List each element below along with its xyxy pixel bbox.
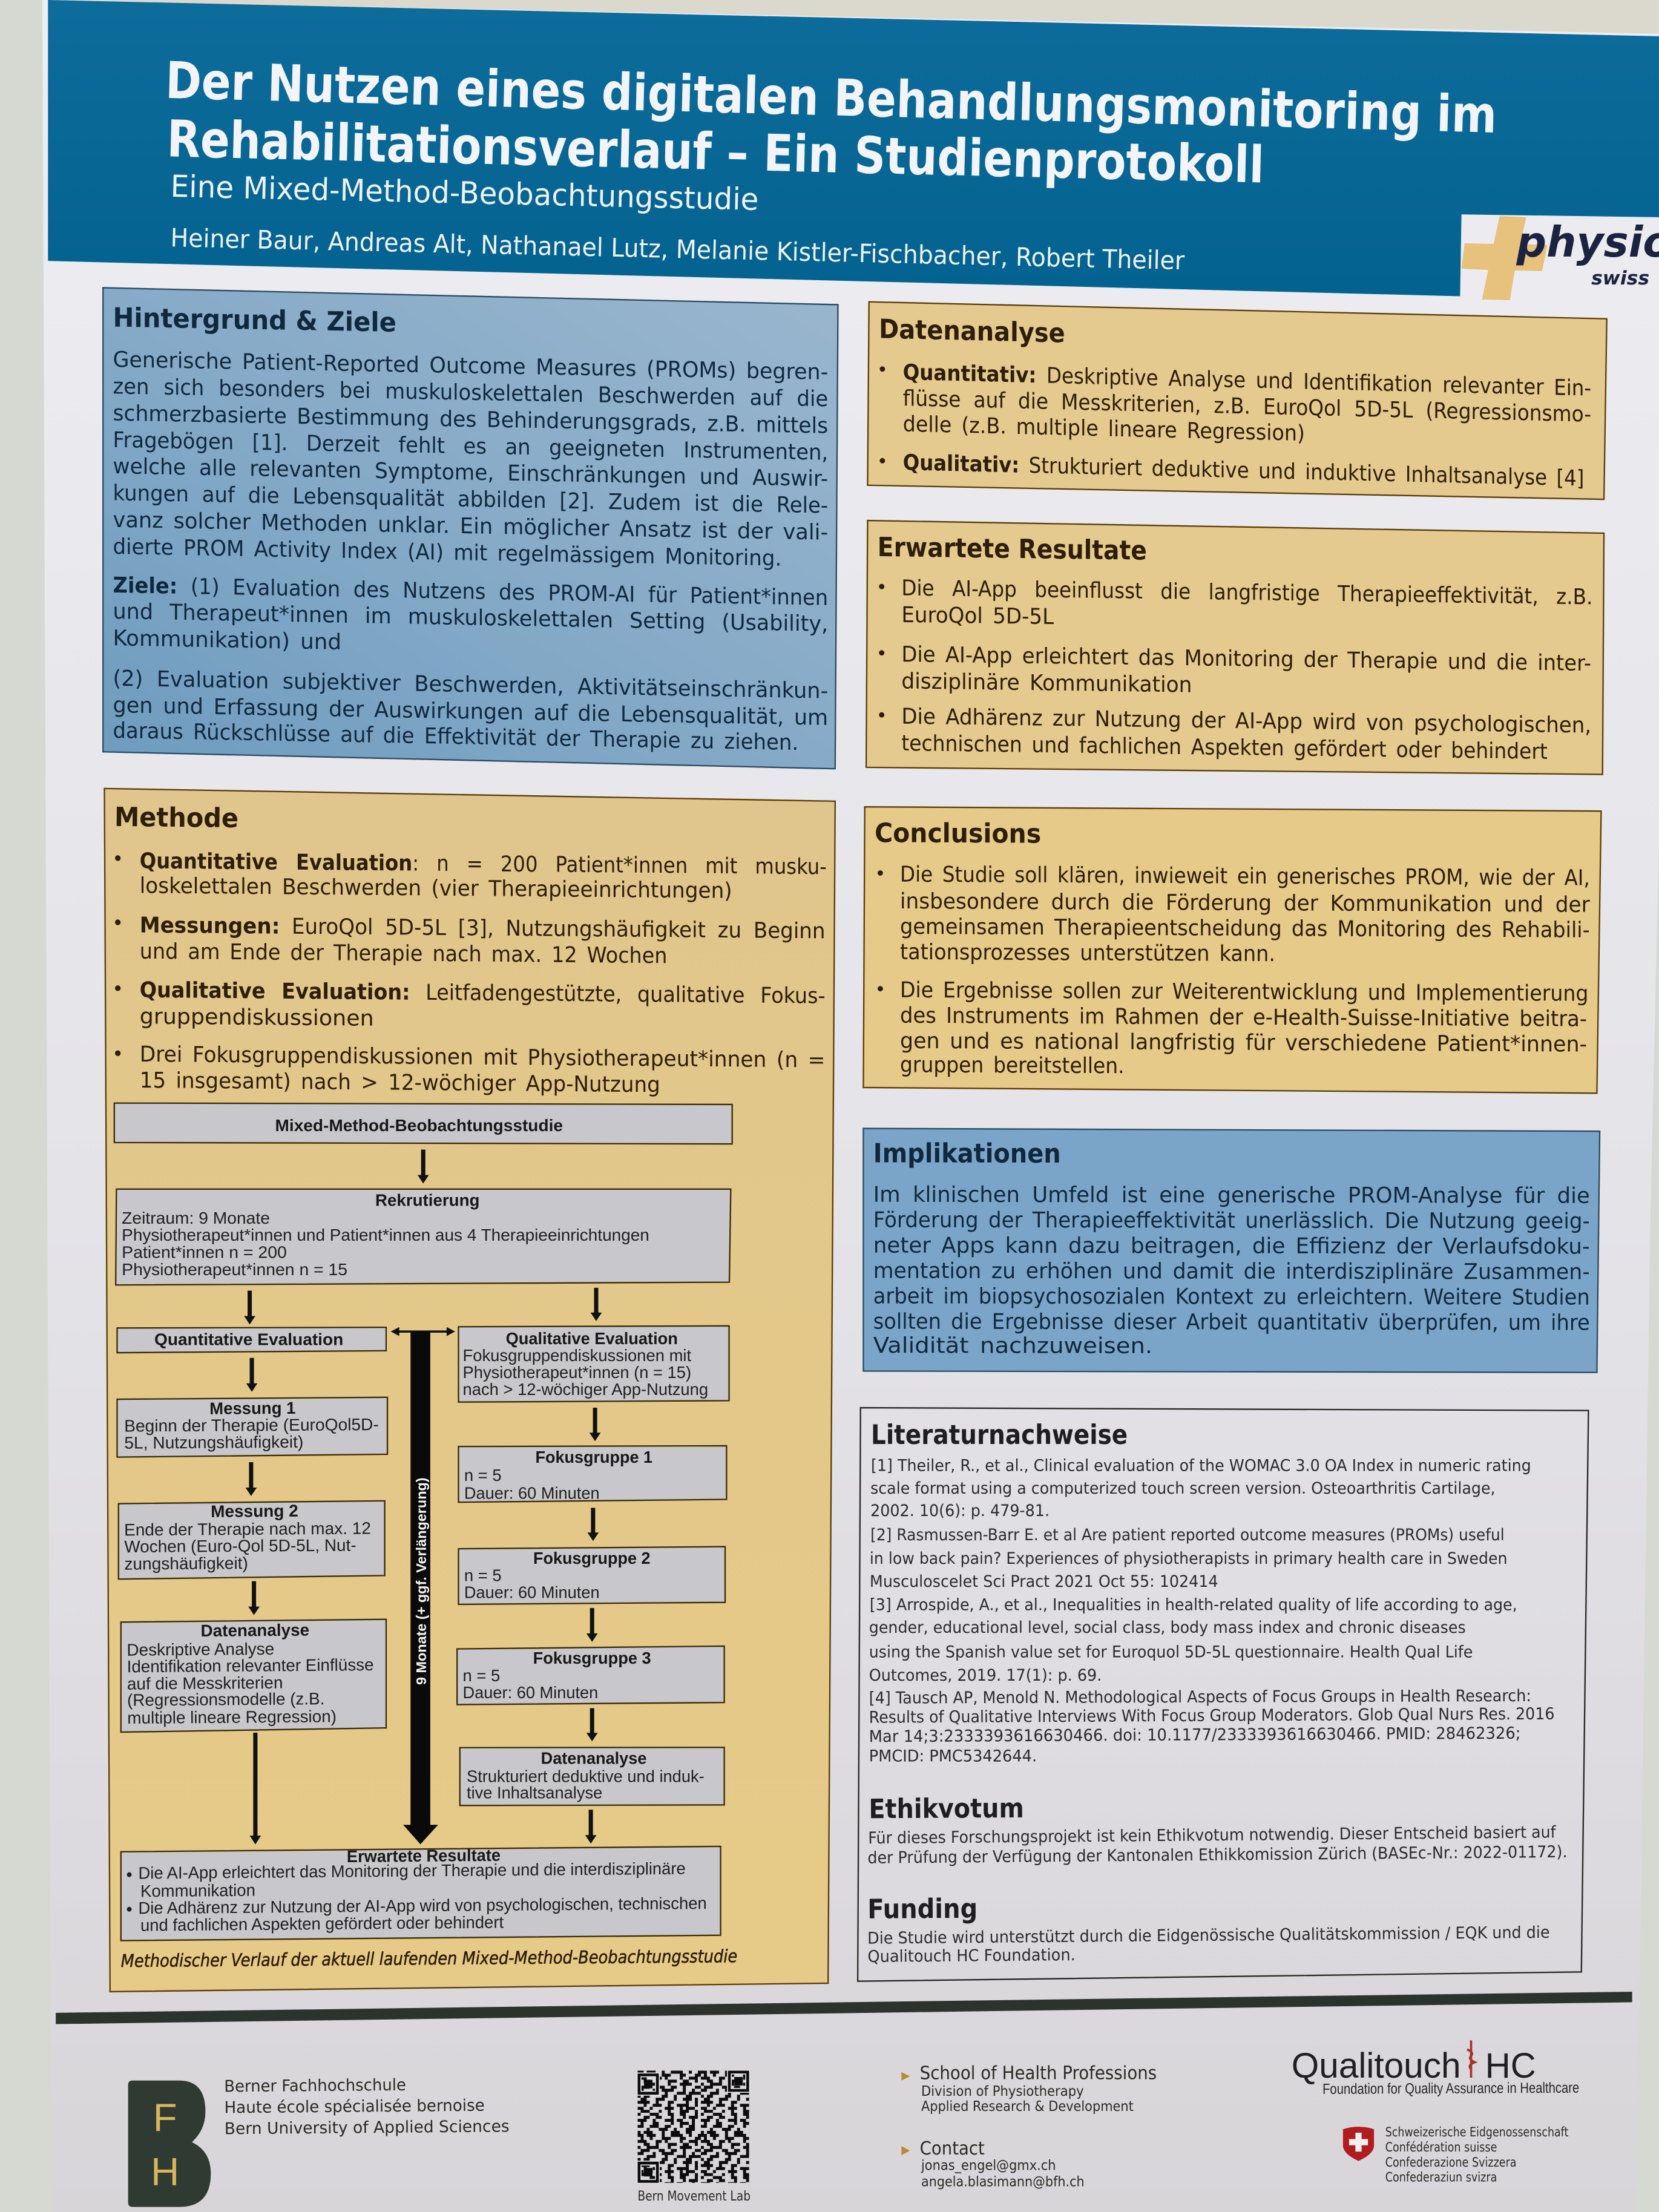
heading: Funding: Funding (867, 1894, 977, 1925)
box: Qualitative Evaluation: nach > 12-wöchiger App-Nutzung (463, 1380, 708, 1399)
text block: references: gender, educational level, social class, body mass index and chronic diseases (869, 1618, 1466, 1637)
box: Mixed-Method-Beobachtungsstudie (114, 1103, 732, 1144)
contact emails (921, 2158, 1085, 2190)
arrow: to Messung 2 (246, 1462, 257, 1496)
icon: Swiss shield (1343, 2127, 1374, 2161)
panel: Literatur, Ethikvotum, Funding (858, 1408, 1588, 1981)
text block: references: [2] Rasmussen-Barr E. et al Are patient reported outcome measures (PROMs) useful (870, 1526, 1505, 1544)
text block: references: Mar 14;3:2333393616630466. doi: 10.1177/2333393616630466. PMID: 28462326; (869, 1724, 1521, 1746)
heading: Literaturnachweise: Literaturnachweise (871, 1420, 1128, 1451)
text block: Hintergrund: Fragebögen [1]. Derzeit fehlt es an geeigneten Instrumenten, (113, 428, 828, 465)
text block: bullets: Qualitativ: Strukturiert deduktive und induktive Inhaltsanalyse [4] (903, 450, 1584, 491)
HC wordmark: HC (1485, 2046, 1536, 2086)
Confederation names: Confederaziun svizra (1385, 2170, 1497, 2185)
text block: Methode bullets: loskelettalen Beschwerden (vier Therapieeinrichtungen) (140, 873, 732, 904)
text block: Hintergrund: dierte PROM Activity Index (AI) mit regelmässigem Monitoring. (113, 534, 781, 571)
box: Erwartete Resultate: Die AI-App erleichtert das Monitoring der Therapie und die interdisziplinäre (138, 1859, 686, 1882)
box: Datenanalyse qualitative (460, 1747, 724, 1805)
text block: Ziele: Ziele: (1) Evaluation des Nutzens des PROM-AI für Patient*innen (113, 573, 828, 611)
arrow: to Fokusgruppe 1 (590, 1408, 600, 1441)
text block: references: [4] Tausch AP, Menold N. Methodological Aspects of Focus Groups in Health Research: (869, 1687, 1531, 1708)
text block: sollten die Ergebnisse dieser Arbeit quantitativ überprüfen, um ihre (873, 1310, 1590, 1336)
arrow: double-headed timeline bracket (391, 1327, 455, 1336)
contact emails: angela.blasimann@bfh.ch (921, 2174, 1085, 2190)
text block: Methode bullets: Drei Fokusgruppendiskussionen mit Physiotherapeut*innen (n = (140, 1042, 826, 1073)
text block: Funding (867, 1923, 1550, 1966)
text block: Ziele: (2) Evaluation subjektiver Beschwerden, Aktivitätseinschränkun- (113, 666, 828, 704)
box: Fokusgruppe 2: Fokusgruppe 2 (533, 1549, 651, 1567)
box: Datenanalyse quantitative: auf die Messkriterien (127, 1673, 283, 1693)
flowchart caption: Methodischer Verlauf der aktuell laufenden Mixed-Method-Beobachtungsstudie (121, 1946, 737, 1971)
text block: Hintergrund: Generische Patient-Reported Outcome Measures (PROMs) begren- (113, 347, 828, 385)
text block: bullets: des Instruments im Rahmen der e-Health-Suisse-Initiative beitra- (900, 1003, 1587, 1032)
box: Fokusgruppe 1 (459, 1446, 726, 1502)
swiss wordmark: swiss (1591, 267, 1649, 289)
text block: references: scale format using a computerized touch screen version. Osteoarthritis Cartilage, (870, 1479, 1496, 1498)
box: Fokusgruppe 3: Dauer: 60 Minuten (463, 1683, 598, 1702)
footer: QR caption: Bern Movement Lab (638, 2188, 751, 2204)
panel: Datenanalyse (867, 302, 1607, 499)
text block: bullets: Die AI-App beeinflusst die langfristige Therapieeffektivität, z.B. (901, 576, 1592, 610)
text block: Ziele: gen und Erfassung der Auswirkungen auf die Lebensqualität, um (113, 693, 828, 730)
letter H: H (151, 2149, 179, 2193)
text block: references: using the Spanish value set for Euroquol 5D-5L questionnaire. Health Qual Life (869, 1643, 1473, 1662)
text block: bullets: Die Studie soll klären, inwieweit ein generisches PROM, wie der AI, (900, 862, 1590, 891)
box: Messung 1 (117, 1397, 387, 1457)
box: Quantitative Evaluation: Quantitative Evaluation (154, 1330, 343, 1349)
box: Messung 1: 5L, Nutzungshäufigkeit) (124, 1433, 303, 1452)
flowchart (114, 1103, 732, 1941)
title (165, 51, 1497, 195)
text block: Hintergrund: zen sich besonders bei muskuloskelettalen Beschwerden auf die (113, 374, 828, 412)
contact emails: jonas_engel@gmx.ch (921, 2158, 1056, 2174)
box: Datenanalyse quantitative: multiple lineare Regression) (127, 1707, 337, 1727)
text block: references: PMCID: PMC5342644. (869, 1747, 1037, 1766)
box: Erwartete Resultate (121, 1844, 721, 1941)
text block: bullets: EuroQol 5D-5L (901, 603, 1054, 629)
heading: Conclusions (875, 818, 1041, 850)
icon: triangle bullet contact (901, 2146, 910, 2155)
box: Messung 2: Messung 2 (211, 1501, 298, 1521)
arrow: 9 month timeline bar (403, 1331, 438, 1844)
box: Datenanalyse qualitative: tive Inhaltsanalyse (467, 1784, 602, 1802)
Confederation names: Confédération suisse (1385, 2140, 1497, 2155)
heading: Datenanalyse (879, 313, 1065, 349)
box: Fokusgruppe 2: n = 5 (464, 1566, 502, 1585)
heading: Hintergrund & Ziele (113, 303, 396, 338)
icon: triangle bullet (901, 2072, 910, 2081)
logo: physio swiss (1462, 216, 1659, 300)
text block: Ethikvotum (867, 1823, 1568, 1868)
heading: Ethikvotum: Ethikvotum (869, 1793, 1024, 1825)
box: Datenanalyse quantitative: Identifikation relevanter Einflüsse (127, 1655, 374, 1676)
text block: neter Apps kann dazu beitragen, die Effizienz der Verlaufsdoku- (873, 1233, 1590, 1259)
arrow: to Qualitative Evaluation (591, 1288, 602, 1321)
box: Fokusgruppe 2: Dauer: 60 Minuten (464, 1583, 600, 1602)
Foundation tagline: Foundation for Quality Assurance in Healthcare (1322, 2080, 1579, 2098)
text block: references: in low back pain? Experiences of physiotherapists in primary health care in Sweden (870, 1549, 1507, 1568)
School text: School of Health Professions (920, 2063, 1157, 2084)
panel: Conclusions (863, 807, 1601, 1093)
arrow: to Quantitative Evaluation (244, 1291, 255, 1325)
text block: bullets: Die Adhärenz zur Nutzung der AI-App wird von psychologischen, (901, 704, 1591, 738)
Confederation names: Confederazione Svizzera (1385, 2155, 1517, 2170)
arrow: to Fokusgruppe 3 (586, 1608, 598, 1642)
box: Datenanalyse qualitative: Datenanalyse (541, 1748, 646, 1767)
text block: Methode bullets: Qualitative Evaluation: Leitfadengestützte, qualitative Fokus- (140, 978, 826, 1009)
text block: bullets: gruppen bereitstellen. (900, 1052, 1125, 1078)
box: Fokusgruppe 1: n = 5 (464, 1466, 502, 1485)
text block: Funding: Qualitouch HC Foundation. (867, 1946, 1076, 1966)
text block: Funding: Die Studie wird unterstützt durch die Eidgenössische Qualitätskommission / EQK und die (867, 1923, 1550, 1948)
text block: Methode bullets: Quantitative Evaluation: n = 200 Patient*innen mit musku- (140, 849, 827, 879)
box: Rekrutierung: Patient*innen n = 200 (122, 1242, 287, 1261)
panel: Erwartete Resultate (866, 520, 1604, 775)
box: Qualitative Evaluation: Fokusgruppendiskussionen mit (463, 1346, 691, 1365)
text block: Hintergrund: schmerzbasierte Bestimmung des Behinderungsgrads, z.B. mittels (113, 401, 828, 439)
footer: Qualitouch HC logo (1292, 2040, 1579, 2098)
Division text: Division of Physiotherapy (921, 2083, 1084, 2099)
box: Datenanalyse quantitative: Datenanalyse (200, 1621, 309, 1640)
text block: Methode bullets (115, 848, 827, 1099)
text block: Hintergrund (113, 347, 828, 572)
text block: Hintergrund: welche alle relevanten Symptome, Einschränkungen und Auswir- (113, 454, 828, 491)
arrow: Datenanalyse quantitative to Resultate (250, 1733, 261, 1845)
text block: Methode bullets: 15 insgesamt) nach > 12-wöchiger App-Nutzung (140, 1068, 660, 1097)
text block: Validität nachzuweisen. (873, 1333, 1152, 1359)
icon: B shape (128, 2081, 211, 2207)
footer: Swiss confederation logo (1343, 2125, 1568, 2185)
box: Datenanalyse quantitative: Deskriptive Analyse (126, 1639, 274, 1659)
box: Erwartete Resultate: und fachlichen Aspekten gefördert oder behindert (140, 1912, 504, 1935)
box: Qualitative Evaluation (459, 1326, 729, 1402)
text block: mentation zu erhöhen und damit die interdisziplinäre Zusammen- (873, 1259, 1590, 1285)
text block: bullets (879, 359, 1591, 491)
box: Messung 1: Messung 1 (209, 1399, 295, 1418)
text block: bullets: insbesondere durch die Förderung der Kommunikation und der (900, 889, 1590, 917)
text block: bullets: disziplinäre Kommunikation (901, 669, 1192, 698)
box: Rekrutierung: Physiotherapeut*innen n = 15 (122, 1260, 347, 1279)
text block: bullets (878, 862, 1590, 1081)
footer: institution names: Haute école spécialisée bernoise (224, 2096, 485, 2117)
text block: Methode bullets: gruppendiskussionen (140, 1004, 374, 1031)
text block: Ziele: und Therapeut*innen im muskuloskelettalen Setting (Usability, (113, 599, 828, 637)
panel: Methode (105, 789, 835, 1992)
text block: Ziele (113, 573, 828, 756)
arrow: to Datenanalyse quantitative (248, 1581, 260, 1615)
header banner (48, 0, 1659, 296)
text block: bullets: Die AI-App erleichtert das Monitoring der Therapie und die inter- (901, 642, 1591, 676)
text block: bullets: tationsprozesses unterstützen kann. (900, 940, 1275, 967)
box: Fokusgruppe 3: Fokusgruppe 3 (533, 1649, 651, 1667)
panel: Implikationen (863, 1129, 1600, 1373)
text block: bullets: gen und es national langfristig für verschiedene Patient*innen- (900, 1029, 1587, 1057)
heading: Methode (114, 802, 238, 834)
footer: institution names: Bern University of Applied Sciences (225, 2117, 510, 2138)
box: Datenanalyse quantitative: (Regressionsmodelle (z.B. (127, 1689, 325, 1710)
text block: bullets: flüsse auf die Messkriterien, z.B. EuroQol 5D-5L (Regressionsmo- (903, 386, 1591, 427)
box: Messung 2 (119, 1501, 385, 1579)
heading: Implikationen (873, 1138, 1061, 1169)
arrow: to Datenanalyse qualitative (586, 1708, 598, 1741)
box: Messung 2: zungshäufigkeit) (124, 1554, 248, 1574)
text block: Ziele: daraus Rückschlüsse auf die Effektivität der Therapie zu ziehen. (113, 718, 798, 755)
text block: Hintergrund: kungen auf die Lebensqualität abbilden [2]. Zudem ist die Rele- (113, 481, 828, 518)
box: Rekrutierung: Rekrutierung (375, 1191, 479, 1210)
Qualitouch wordmark: Qualitouch (1292, 2046, 1460, 2086)
arrow: to Rekrutierung (418, 1150, 429, 1183)
text block: Ethikvotum: Für dieses Forschungsprojekt ist kein Ethikvotum notwendig. Dieser Entscheid basiert auf (868, 1823, 1557, 1848)
text block: references: [1] Theiler, R., et al., Clinical evaluation of the WOMAC 3.0 OA Index in numeric rating (871, 1456, 1531, 1475)
box: Fokusgruppe 3 (457, 1646, 724, 1705)
box: Rekrutierung: Physiotherapeut*innen und Patient*innen aus 4 Therapieeinrichtungen (122, 1226, 649, 1244)
footer: institution names: Berner Fachhochschule (224, 2076, 406, 2096)
box: Qualitative Evaluation: Physiotherapeut*innen (n = 15) (463, 1363, 691, 1382)
background: top wall strip (42, 0, 1659, 37)
arrow: 9 month timeline bar: 9 Monate (+ ggf. Verlängerung) (413, 1477, 429, 1685)
box: Rekrutierung (116, 1189, 731, 1285)
box: Erwartete Resultate: Die Adhärenz zur Nutzung der AI-App wird von psychologischen, technischen (138, 1894, 707, 1917)
authors: Heiner Baur, Andreas Alt, Nathanael Lutz, Melanie Kistler-Fischbacher, Robert Theiler (170, 223, 1185, 275)
box: Quantitative Evaluation (117, 1327, 386, 1353)
icon: rod of Asclepius (1467, 2040, 1475, 2078)
text block: bullets: technischen und fachlichen Aspekten gefördert oder behindert (901, 731, 1548, 764)
box: Datenanalyse quantitative (121, 1620, 386, 1732)
box: Qualitative Evaluation: Qualitative Evaluation (506, 1329, 678, 1348)
box: Fokusgruppe 3: n = 5 (463, 1666, 500, 1685)
Confederation names (1385, 2125, 1568, 2185)
text block: Hintergrund: vanz solcher Methoden unklar. Ein möglicher Ansatz ist der vali- (113, 508, 828, 545)
text block: references: [3] Arrospide, A., et al., Inequalities in health-related quality of life according to age, (870, 1596, 1517, 1615)
footer: school contact block (901, 2063, 1157, 2190)
box: Fokusgruppe 2 (459, 1547, 725, 1604)
text block: arbeit im biopsychosozialen Kontext zu erleichtern. Weitere Studien (873, 1284, 1590, 1310)
heading: Erwartete Resultate (878, 532, 1147, 566)
box: Erwartete Resultate: Kommunikation (140, 1881, 255, 1900)
text block: references: Outcomes, 2019. 17(1): p. 69. (869, 1666, 1102, 1685)
box: Rekrutierung: Zeitraum: 9 Monate (122, 1209, 270, 1227)
text block: Ethikvotum: der Prüfung der Verfügung der Kantonalen Ethikkomission Zürich (BASEc-Nr.: 2022-01172). (867, 1843, 1568, 1868)
footer: BFH logo (128, 2081, 211, 2207)
arrow: to Messung 1 (246, 1358, 257, 1392)
text block: bullets: delle (z.B. multiple lineare Regression) (903, 412, 1305, 446)
box: Mixed-Method-Beobachtungsstudie: Mixed-Method-Beobachtungsstudie (275, 1116, 563, 1135)
text block: bullets: Quantitativ: Deskriptive Analyse und Identifikation relevanter Ein- (903, 360, 1591, 401)
letter F: F (153, 2095, 177, 2139)
Applied Research text: Applied Research & Development (921, 2098, 1134, 2115)
footer: institution names (224, 2075, 510, 2138)
text block: Methode bullets: Messungen: EuroQol 5D-5L [3], Nutzungshäufigkeit zu Beginn (140, 913, 826, 944)
text block: Methode bullets: und am Ende der Therapie nach max. 12 Wochen (140, 939, 667, 968)
box: Fokusgruppe 1: Fokusgruppe 1 (536, 1448, 652, 1466)
box: Erwartete Resultate: Erwartete Resultate (347, 1846, 501, 1866)
text block: references: Musculoscelet Sci Pract 2021 Oct 55: 102414 (870, 1572, 1218, 1591)
box: Messung 2: Ende der Therapie nach max. 12 (124, 1519, 371, 1539)
box: Messung 2: Wochen (Euro-Qol 5D-5L, Nut- (124, 1535, 356, 1556)
icon: gold cross (1462, 216, 1548, 300)
arrow: to Fokusgruppe 2 (588, 1508, 599, 1541)
text block: bullets: Die Ergebnisse sollen zur Weiterentwicklung und Implementierung (900, 978, 1588, 1006)
text block (873, 1183, 1590, 1359)
box: Messung 1: Beginn der Therapie (EuroQol5D- (124, 1415, 379, 1436)
text block: Im klinischen Umfeld ist eine generische PROM-Analyse für die (873, 1183, 1590, 1209)
footer: QR code (638, 2070, 749, 2183)
text block: bullets: gemeinsamen Therapieentscheidung das Monitoring des Rehabili- (900, 914, 1590, 943)
text block: references: 2002. 10(6): p. 479-81. (870, 1501, 1050, 1520)
panel: Hintergrund und Ziele (103, 287, 838, 769)
Contact heading: Contact (920, 2138, 985, 2159)
Confederation names: Schweizerische Eidgenossenschaft (1385, 2125, 1568, 2140)
text block: Förderung der Therapieeffektivität unerlässlich. Die Nutzung geeig- (873, 1208, 1590, 1234)
box: Fokusgruppe 1: Dauer: 60 Minuten (464, 1483, 600, 1502)
text block: references (869, 1456, 1554, 1766)
text block: bullets (879, 576, 1592, 765)
arrow: Datenanalyse qualitative to Resultate (585, 1810, 596, 1843)
subtitle: Eine Mixed-Method-Beobachtungsstudie (170, 168, 759, 217)
text block: Ziele: Kommunikation) und (113, 626, 341, 655)
text block: references: Results of Qualitative Interviews With Focus Group Moderators. Glob Qual Nurs Res. 2016 (869, 1705, 1554, 1727)
box: Datenanalyse qualitative: Strukturiert deduktive und induk- (467, 1767, 705, 1786)
title: Rehabilitationsverlauf – Ein Studienprotokoll (166, 109, 1265, 195)
